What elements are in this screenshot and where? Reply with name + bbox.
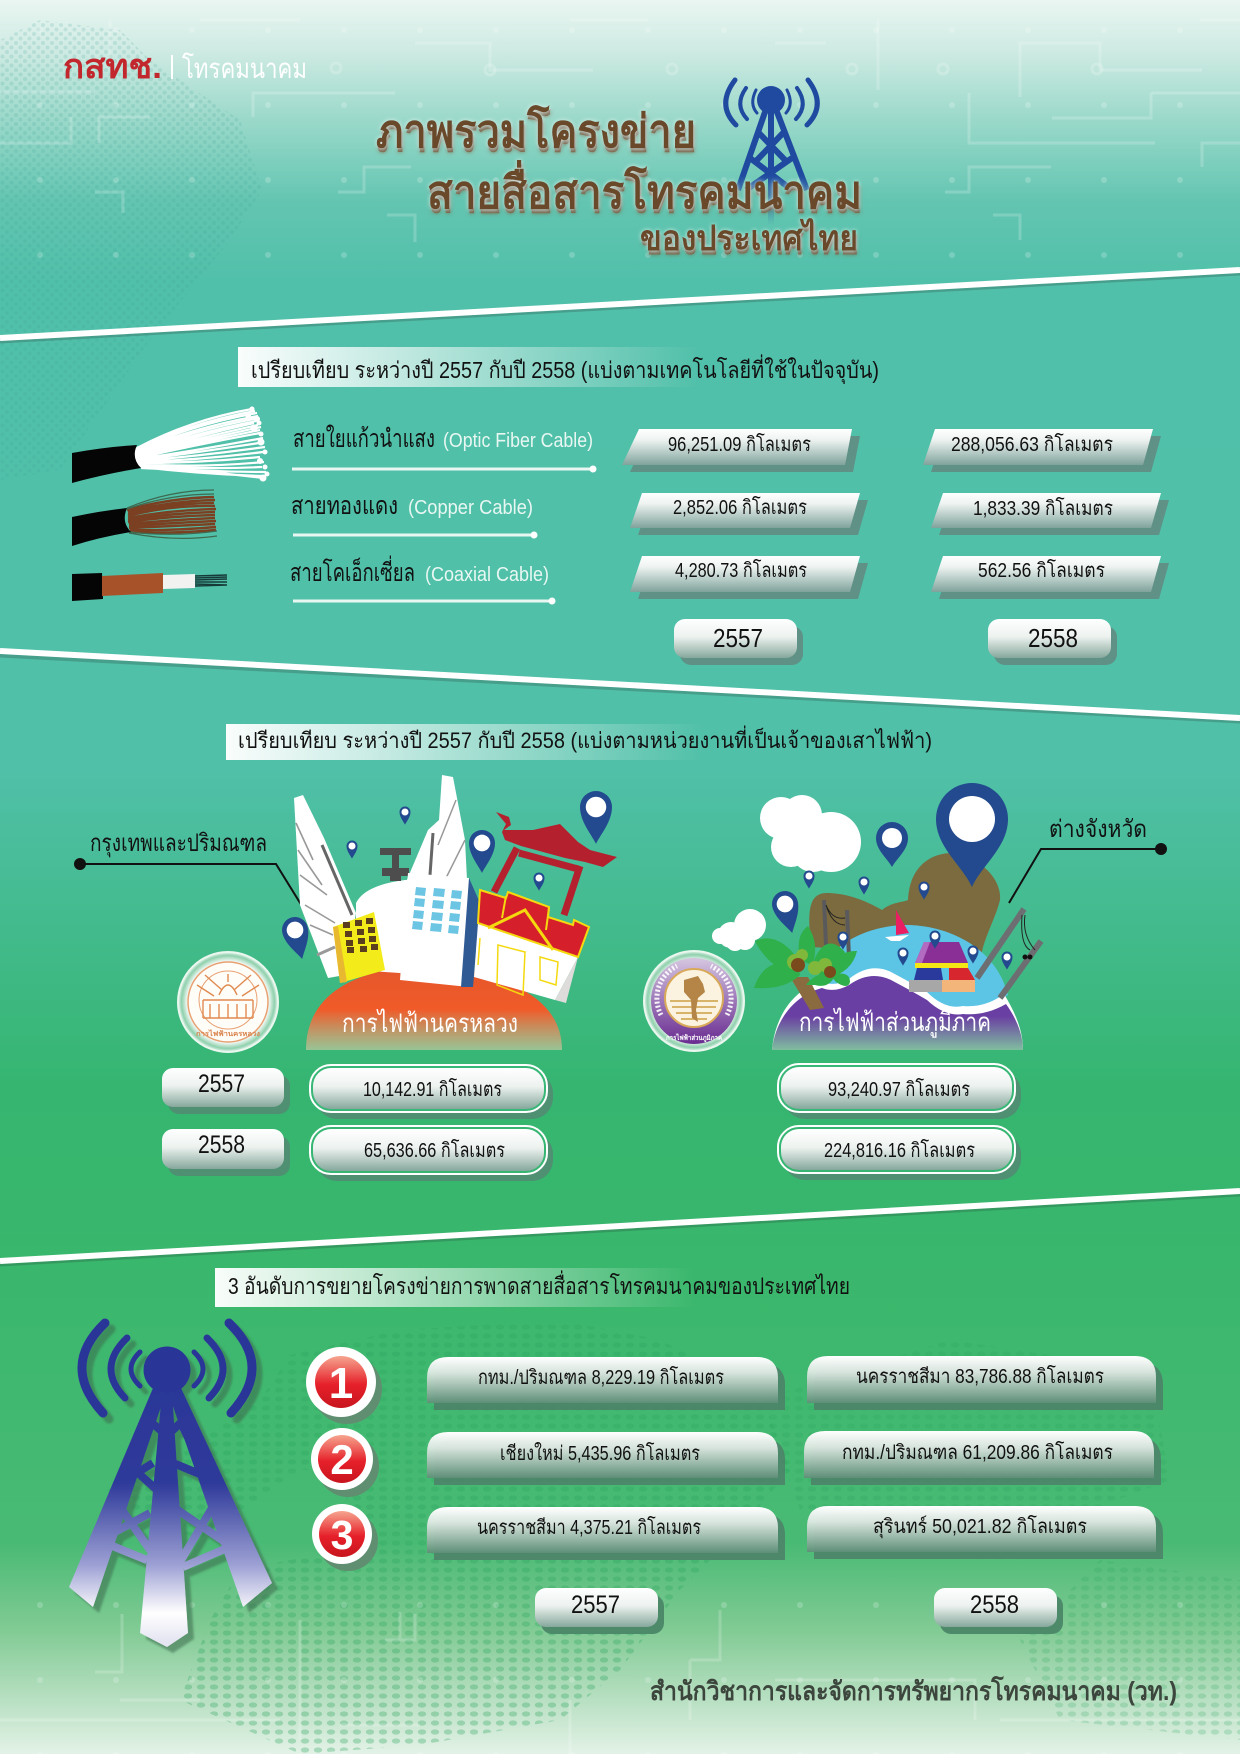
MEA value 2558: 65,636.66 กิโลเมตร: [364, 1139, 505, 1162]
orange dome: [306, 968, 562, 1050]
year pill 2558: [988, 619, 1117, 665]
medium location pin: [876, 822, 908, 867]
value box: coaxial 2557: 4,280.73 กิโลเมตร: [675, 559, 807, 582]
ranking box: 2558 rank 2: [804, 1431, 1161, 1485]
label: coaxial: (Coaxial Cable): [425, 564, 549, 586]
year pill 2557 bottom: 2557: [571, 1591, 620, 1619]
PEA value 2557: 93,240.97 กิโลเมตร: [828, 1078, 970, 1101]
logo: [63, 48, 307, 86]
left wing monument: [294, 795, 356, 978]
MEA value 2557: 10,142.91 กิโลเมตร: [363, 1078, 502, 1101]
value box: fiber 2558: [923, 429, 1161, 472]
ranking box: 2557 rank 2: [427, 1432, 785, 1485]
right wing monument: [406, 775, 467, 882]
PEA value 2557: [778, 1064, 1021, 1119]
heading bar: technology comparison: เปรียบเทียบ ระหว่างปี 2557 กับปี 2558 (แบ่งตามเทคโนโลยีที่ใช้ในปัจจุบัน): [251, 354, 879, 384]
ranking box: 2557 rank 1: [427, 1357, 785, 1410]
palm trees: [754, 926, 857, 1010]
rank badge 2: 2: [330, 1436, 354, 1483]
utility poles: [824, 900, 1041, 998]
red giant swing gate: [494, 812, 617, 915]
left year pill 2557: 2557: [198, 1070, 245, 1098]
diagonal divider 1: [0, 270, 1240, 341]
background dots bottom: [0, 1600, 1240, 1754]
MEA value 2557: [310, 1065, 553, 1119]
value box: copper 2558: [931, 493, 1169, 535]
left year pill 2558: 2558: [198, 1131, 245, 1159]
clouds: [712, 795, 861, 951]
title: [376, 104, 862, 258]
title: สายสื่อสารโทรคมนาคม: [427, 160, 862, 218]
ranking box: 2557 rank 2: เชียงใหม่ 5,435.96 กิโลเมตร: [500, 1442, 700, 1465]
diagonal divider 2: [0, 651, 1240, 721]
white wave band and purple dome: [772, 968, 1023, 1050]
brown mountains: [809, 853, 1000, 957]
title: ภาพรวมโครงข่าย: [376, 104, 696, 157]
callout: provincial: ต่างจังหวัด: [1049, 816, 1147, 843]
value box: coaxial 2557: [630, 556, 868, 599]
ranking box: 2558 rank 1: นครราชสีมา 83,786.88 กิโลเมตร: [856, 1365, 1104, 1388]
callout: Bangkok and vicinity: [74, 830, 310, 919]
illustration: Bangkok city: [279, 775, 617, 1050]
year pill 2557 bottom: [535, 1588, 664, 1634]
year pill 2558: 2558: [1028, 623, 1078, 653]
rank badge 3: 3: [331, 1512, 353, 1558]
ranking box: 2557 rank 3: [427, 1507, 785, 1560]
year pill 2557: [674, 619, 803, 665]
logo seal: MEA: [178, 952, 278, 1052]
yellow building: [333, 912, 385, 983]
value box: copper 2557: [630, 493, 868, 535]
footer credit: สำนักวิชาการและจัดการทรัพยากรโทรคมนาคม (วท.): [650, 1675, 1177, 1706]
icon: copper cable: [72, 490, 217, 546]
value box: coaxial 2558: 562.56 กิโลเมตร: [978, 559, 1105, 582]
background dots top: [0, 0, 1240, 270]
value box: fiber 2557: 96,251.09 กิโลเมตร: [668, 433, 811, 456]
logo seal: PEA: [644, 951, 744, 1051]
callout: provincial: [1009, 816, 1167, 903]
domed building: [356, 848, 430, 975]
PEA value 2558: 224,816.16 กิโลเมตร: [824, 1139, 975, 1162]
title: ของประเทศไทย: [640, 217, 858, 258]
label: optic fiber: [292, 424, 596, 472]
ranking box: 2557 rank 3: นครราชสีมา 4,375.21 กิโลเมตร: [477, 1516, 701, 1539]
heading bar: top three: [215, 1268, 850, 1307]
cross braces: [110, 1417, 237, 1567]
label: copper: สายทองแดง: [291, 492, 398, 520]
rank badge 1: [306, 1347, 382, 1424]
icon: coaxial cable: [72, 573, 227, 601]
ranking box: 2558 rank 2: กทม./ปริมณฑล 61,209.86 กิโลเมตร: [842, 1441, 1113, 1464]
illustration: provincial scenery: [712, 783, 1041, 1050]
left year pill 2558: [162, 1129, 290, 1176]
label: coaxial: [290, 555, 556, 604]
logo: โทรคมนาคม: [182, 52, 307, 84]
dome label: การไฟฟ้าส่วนภูมิภาค: [799, 1007, 991, 1038]
MEA value 2558: [310, 1126, 553, 1181]
temple: [474, 890, 589, 1003]
rank badge 2: [311, 1428, 379, 1497]
large location pin: [936, 783, 1008, 887]
value box: copper 2557: 2,852.06 กิโลเมตร: [673, 496, 807, 519]
ranking box: 2557 rank 1: กทม./ปริมณฑล 8,229.19 กิโลเมตร: [478, 1366, 724, 1389]
tower legs: [69, 1388, 165, 1607]
small location pins: [769, 870, 1012, 970]
value box: coaxial 2558: [931, 556, 1169, 599]
icon: large antenna tower: [69, 1323, 272, 1647]
rank badge 1: 1: [329, 1359, 353, 1408]
tall office building: [400, 873, 480, 987]
heading bar: top three: 3 อันดับการขยายโครงข่ายการพาดสายสื่อสารโทรคมนาคมของประเทศไทย: [228, 1270, 850, 1299]
heading bar: pole owner comparison: [226, 724, 932, 760]
label: copper: [291, 492, 538, 538]
value box: fiber 2558: 288,056.63 กิโลเมตร: [951, 433, 1113, 456]
sailboat: [885, 910, 909, 941]
heading bar: pole owner comparison: เปรียบเทียบ ระหว่างปี 2557 กับปี 2558 (แบ่งตามหน่วยงานที่เป็นเจ้าของเสาไฟฟ้า): [238, 725, 932, 753]
logo seal: MEA: การไฟฟ้านครหลวง: [196, 1029, 261, 1038]
label: optic fiber: สายใยแก้วนำแสง: [293, 424, 435, 453]
dome label: การไฟฟ้านครหลวง: [342, 1008, 518, 1038]
label: optic fiber: (Optic Fiber Cable): [443, 430, 593, 452]
year pill 2558 bottom: 2558: [970, 1591, 1019, 1619]
value box: fiber 2557: [622, 429, 860, 472]
houses: [909, 942, 975, 992]
PEA value 2558: [778, 1126, 1021, 1180]
logo seal: PEA: การไฟฟ้าส่วนภูมิภาค: [666, 1033, 722, 1043]
bay water: [820, 925, 1008, 1012]
small antenna tower icon: [726, 80, 817, 225]
ranking box: 2558 rank 3: [807, 1506, 1163, 1559]
heading bar: technology comparison: [238, 347, 879, 387]
ranking box: 2558 rank 3: สุรินทร์ 50,021.82 กิโลเมตร: [873, 1515, 1087, 1539]
icon: optic fiber cable: [72, 406, 270, 483]
logo: กสทช.: [63, 48, 162, 86]
label: coaxial: สายโคเอ็กเซี่ยล: [290, 555, 415, 587]
ranking box: 2558 rank 1: [807, 1356, 1163, 1410]
left year pill 2557: [162, 1068, 290, 1114]
callout: Bangkok and vicinity: กรุงเทพและปริมณฑล: [90, 830, 267, 858]
value box: copper 2558: 1,833.39 กิโลเมตร: [973, 497, 1113, 520]
signal waves: [82, 1323, 252, 1413]
label: copper: (Copper Cable): [408, 497, 533, 519]
year pill 2557: 2557: [713, 623, 763, 653]
location pins: [279, 791, 612, 962]
rank badge 3: [312, 1504, 378, 1571]
diagonal divider 3: [0, 1191, 1240, 1264]
year pill 2558 bottom: [934, 1588, 1063, 1634]
